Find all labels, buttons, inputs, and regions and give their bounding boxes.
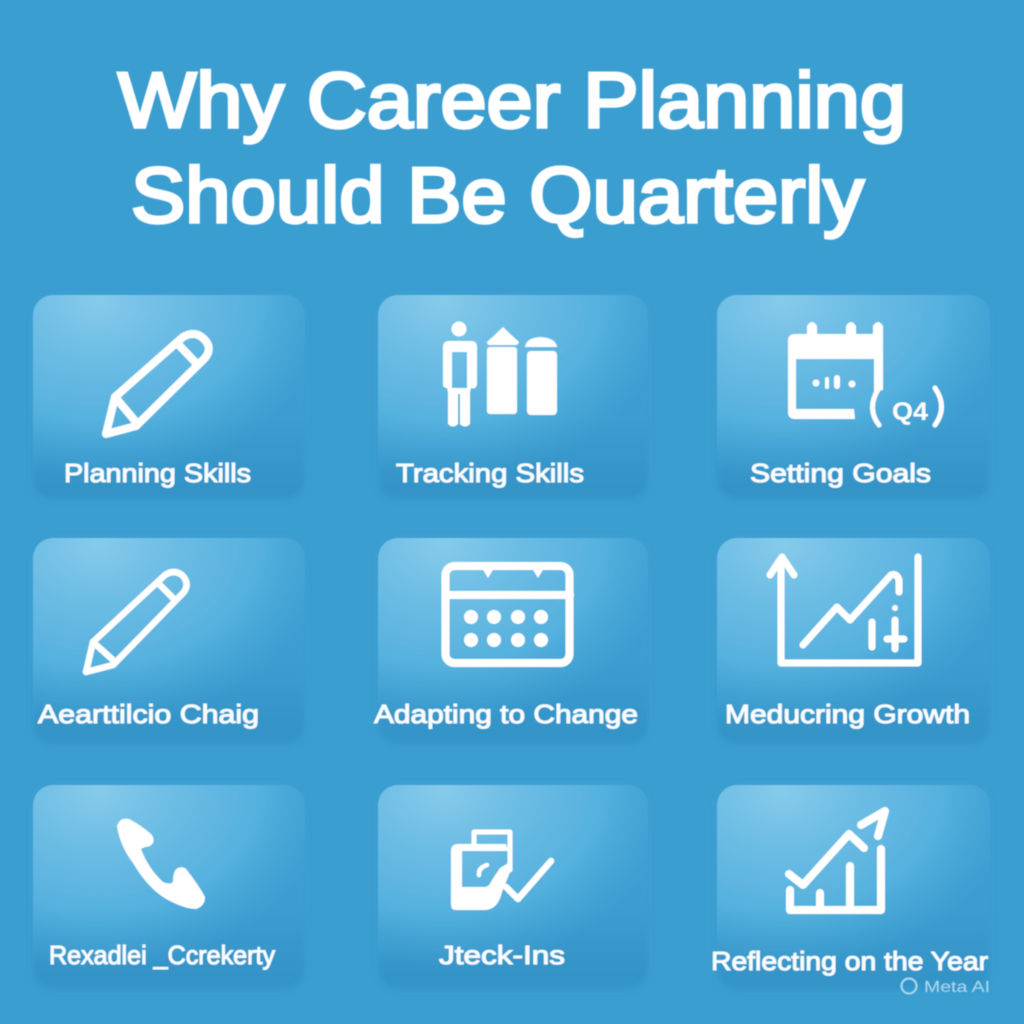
panel: Rexadlei Ccrekerty [33,785,305,990]
panel: Meducring Growth [717,538,990,745]
panel: Aearttilcio Chaig [33,538,305,745]
icon: cards and check [451,832,551,910]
icon: pencil [106,334,209,434]
label: Tracking Skills: Tracking Skills [396,458,584,488]
panel: Check-Ins [378,785,648,990]
panel: Setting Goals [717,295,990,500]
label: Meducring Growth: Meducring Growth [725,699,970,729]
title: Should Be Quarterly [131,151,864,239]
watermark: Meta AI [902,978,990,996]
title: Why Career Planning [118,56,906,144]
label: Rexadlei Ccrekerty: Rexadlei _Ccrekerty [49,940,275,970]
icon: phone handset [117,819,205,909]
icon: person and columns [443,322,557,426]
label: Planning Skills: Planning Skills [64,458,251,488]
watermark: Meta AI: Meta AI [924,979,990,996]
label: Setting Goals: Setting Goals [750,458,931,488]
icon: calendar Q4 [788,322,942,426]
icon: slim pencil [86,572,187,672]
panel: Reflecting on the Year [711,785,990,990]
icon: calendar Q4: Q4 [892,398,928,426]
title [118,56,906,239]
label: Aearttilcio Chaig: Aearttilcio Chaig [38,699,259,729]
label: Reflecting on the Year: Reflecting on the Year [711,946,988,976]
icon: growth chart [770,557,918,663]
label: Check-Ins: Jteck-Ins [439,940,565,970]
panel: Planning Skills [33,295,305,500]
panel: Tracking Skills [378,295,648,500]
icon: calendar grid [446,566,570,663]
label: Adapting to Change: Adapting to Change [374,699,638,729]
icon: check growth bars [789,811,885,910]
panel: Adapting to Change [374,538,648,745]
